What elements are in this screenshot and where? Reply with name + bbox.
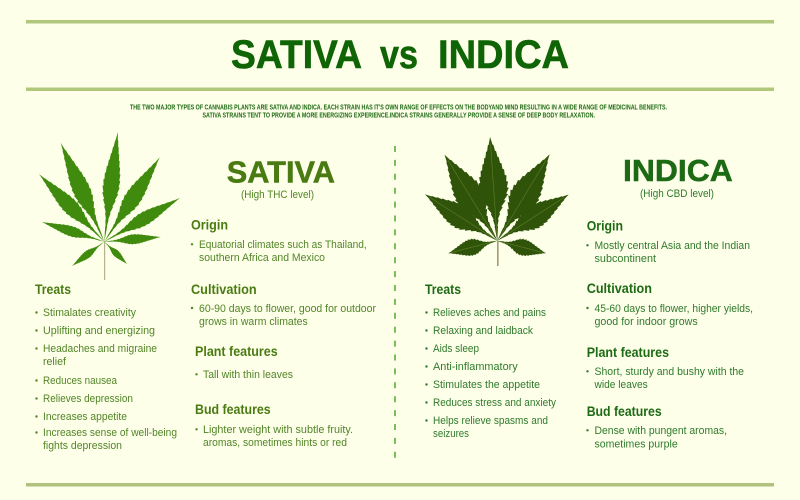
panel: sativa treats [35, 282, 177, 452]
intro text: SATIVA STRAINS TENT TO PROVIDE A MORE ENERGIZING EXPERIENCE.INDICA STRAINS GENERALLY PROVIDE A SENSE OF DEEP BODY RELAXATION. [202, 111, 595, 120]
panel: sativa treats: Reduces nausea [43, 375, 117, 387]
sativa heading: SATIVA [227, 154, 335, 189]
title: vs [380, 33, 418, 77]
panel: indica treats: Relieves aches and pains [433, 307, 546, 319]
panel: indica treats: Helps relieve spasms and [433, 415, 548, 427]
panel: indica treats: Treats [425, 282, 461, 297]
panel: indica plant features: Short, sturdy and bushy with the [594, 366, 744, 378]
panel: sativa bud features: Bud features [195, 402, 271, 417]
panel: sativa origin [191, 217, 367, 264]
center dashed divider [394, 146, 396, 458]
panel: sativa origin: Equatorial climates such as Thailand, [199, 239, 367, 251]
panel: sativa cultivation: grows in warm climates [199, 316, 308, 328]
panel: indica treats: Relaxing and laidback [433, 325, 534, 337]
sativa heading: (High THC level) [241, 189, 314, 201]
panel: sativa treats: Increases sense of well-being [43, 427, 177, 439]
panel: sativa treats: relief [43, 356, 66, 368]
panel: indica cultivation: Cultivation [587, 281, 652, 296]
panel: indica cultivation [586, 281, 753, 328]
panel: sativa plant features: Plant features [195, 344, 278, 359]
indica heading: (High CBD level) [640, 188, 714, 200]
panel: indica treats: Stimulates the appetite [433, 379, 540, 391]
panel: indica plant features: Plant features [587, 345, 669, 360]
panel: sativa plant features [195, 344, 293, 381]
title: INDICA [438, 33, 569, 77]
panel: indica bud features: Bud features [587, 404, 662, 419]
intro text [130, 102, 667, 120]
panel: sativa origin: Origin [191, 217, 228, 232]
panel: indica cultivation: 45-60 days to flower, higher yields, [594, 303, 753, 315]
panel: indica treats: Anti-inflammatory [433, 361, 518, 373]
panel: sativa bud features: Lighter weight with subtle fruity. [203, 424, 353, 436]
panel: sativa treats: fights depression [43, 440, 122, 452]
panel: sativa cultivation: Cultivation [191, 282, 257, 297]
panel: sativa treats: Uplifting and energizing [43, 325, 155, 337]
title [231, 33, 569, 77]
panel: indica origin [586, 219, 750, 265]
panel: sativa bud features: aromas, sometimes hints or red [203, 437, 347, 449]
panel: indica origin: Origin [587, 219, 623, 234]
panel: sativa treats: Relieves depression [43, 393, 133, 405]
panel: sativa treats: Headaches and migraine [43, 343, 157, 355]
panel: sativa origin: southern Africa and Mexico [199, 252, 325, 264]
indica heading: INDICA [623, 153, 733, 188]
panel: sativa treats: Treats [35, 282, 71, 297]
panel: indica treats: Aids sleep [433, 343, 479, 355]
panel: sativa treats: Increases appetite [43, 411, 127, 423]
icon: sativa leaf [33, 131, 184, 280]
panel: indica bud features: sometimes purple [594, 439, 678, 451]
panel: indica origin: Mostly central Asia and the Indian [594, 240, 750, 252]
panel: sativa treats: Stimalates creativity [43, 307, 137, 319]
panel: indica treats: Reduces stress and anxiety [433, 397, 557, 409]
panel: indica bud features [586, 404, 727, 451]
panel: indica treats [425, 282, 557, 440]
panel: sativa cultivation: 60-90 days to flower, good for outdoor [199, 303, 376, 315]
panel: indica origin: subcontinent [594, 253, 656, 265]
panel: sativa plant features: Tall with thin leaves [203, 369, 293, 381]
panel: indica plant features: wide leaves [594, 379, 648, 391]
panel: sativa cultivation [191, 282, 376, 328]
panel: indica treats: seizures [433, 428, 469, 440]
panel: sativa bud features [195, 402, 353, 449]
title: SATIVA [231, 33, 362, 77]
panel: indica plant features [586, 345, 744, 391]
icon: indica leaf [418, 136, 575, 266]
panel: indica bud features: Dense with pungent aromas, [594, 425, 727, 437]
panel: indica cultivation: good for indoor grows [594, 316, 698, 328]
